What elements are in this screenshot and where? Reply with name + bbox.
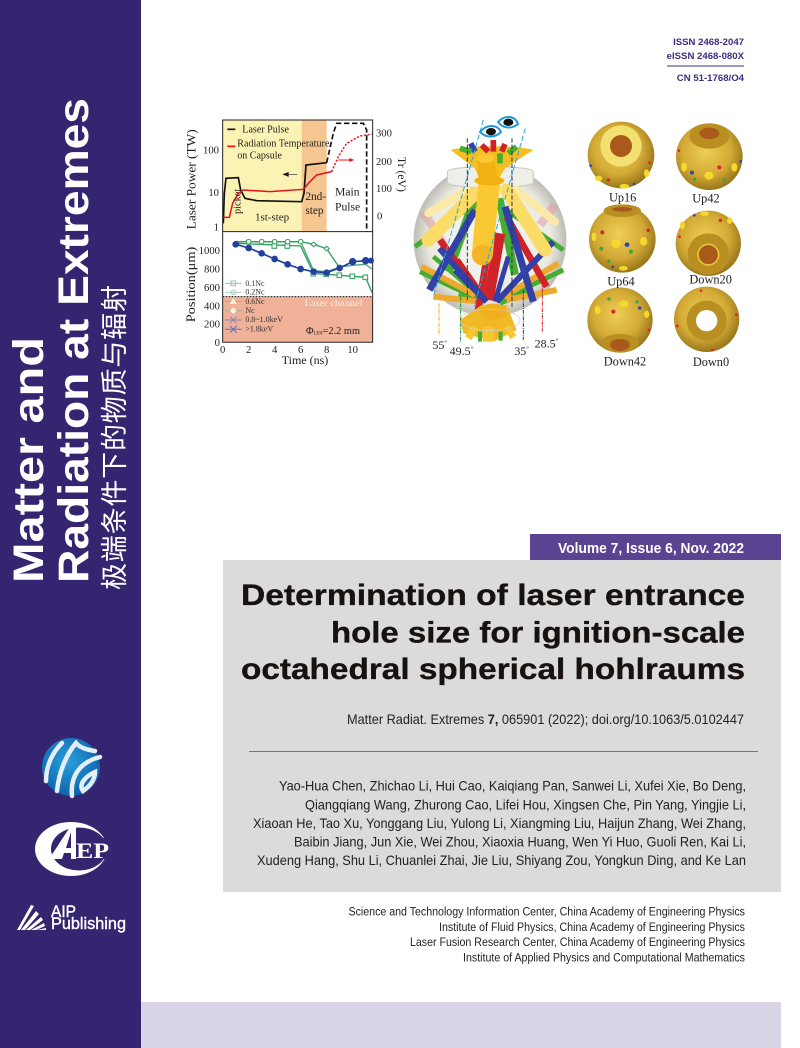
top chart labels xyxy=(185,124,408,233)
lower chart text: 200 xyxy=(204,320,220,331)
ISSN block xyxy=(667,37,745,84)
central top rod xyxy=(477,158,498,178)
hohlraum 3D illustration xyxy=(414,117,566,358)
angle labels: ° xyxy=(471,345,474,352)
capsule labels: Up64 xyxy=(607,274,635,288)
ISSN block: eISSN 2468-080X xyxy=(667,51,745,62)
capsule Up64 xyxy=(589,204,656,273)
top chart labels: Tr (eV) xyxy=(395,157,408,192)
icon: eyes xyxy=(480,117,518,136)
bottom band xyxy=(141,1002,781,1048)
top chart labels: on Capsule xyxy=(237,151,283,162)
article title: octahedral spherical hohlraums xyxy=(241,653,745,686)
lower chart text: 1000 xyxy=(199,246,220,257)
arrows xyxy=(283,172,297,176)
affiliations: Institute of Fluid Physics, China Academy of Engineering Physics xyxy=(439,920,745,934)
rods: red xyxy=(440,217,547,315)
laser pulse line xyxy=(223,163,327,223)
legend: 0.1Nc xyxy=(245,279,265,288)
lower chart text: Time (ns) xyxy=(282,353,328,367)
bottom cap with rods xyxy=(460,304,520,342)
lower chart text: =2.2 mm xyxy=(323,326,360,337)
legend: 0.2Nc xyxy=(245,287,265,296)
authors: Xudeng Hang, Shu Li, Chuanlei Zhai, Jie Liu, Shiyang Zou, Yongkun Ding, and Ke Lan xyxy=(257,853,746,868)
top chart labels: 300 xyxy=(376,128,392,139)
top chart labels: Laser Pulse xyxy=(242,124,290,135)
top chart labels: step xyxy=(305,205,324,217)
background pale rods xyxy=(423,205,555,247)
glass sphere xyxy=(414,164,566,316)
lower chart text: 800 xyxy=(204,265,220,276)
panel: orange second step xyxy=(302,120,327,232)
chart: laser pulse and position xyxy=(184,120,408,367)
top chart labels: 200 xyxy=(376,157,392,168)
channel boundary xyxy=(223,295,373,298)
dashed sight lines xyxy=(433,120,542,343)
lower chart text: 6 xyxy=(298,345,304,356)
affiliations: Science and Technology Information Center, China Academy of Engineering Physics xyxy=(348,905,745,919)
top chart labels: Radiation Temperature xyxy=(237,139,330,150)
top chart labels: picket xyxy=(233,189,244,214)
capsule Up42 xyxy=(676,123,743,190)
capsule Down0 xyxy=(674,287,739,352)
top funnel xyxy=(451,146,533,180)
grey title panel xyxy=(223,560,781,892)
capsule labels xyxy=(604,190,732,369)
lower chart text: 10 xyxy=(347,345,358,356)
rods: large yellow xyxy=(428,190,555,250)
gold capsule models xyxy=(587,122,743,369)
lower chart text: 0 xyxy=(220,345,225,356)
volume banner xyxy=(530,534,781,560)
angle labels: 49.5 xyxy=(450,344,471,358)
lower chart text: 0 xyxy=(215,338,220,349)
angle labels: ° xyxy=(526,345,529,352)
volume banner: Volume 7, Issue 6, Nov. 2022 xyxy=(558,540,744,557)
radiation temperature line xyxy=(223,172,332,217)
lower chart text: 4 xyxy=(272,345,278,356)
panel: yellow picket and first step xyxy=(223,120,302,232)
capsule labels: Down20 xyxy=(689,273,732,287)
left spine xyxy=(0,0,141,1048)
capsule Up16 xyxy=(588,122,654,189)
lower chart text: Φ xyxy=(306,326,314,337)
authors: Baibin Jiang, Jun Xie, Wei Zhou, Xiaoxia Huang, Wen Yi Huo, Guoli Ren, Kai Li, xyxy=(294,835,746,850)
panel: laser channel xyxy=(223,297,373,342)
capsule labels: Up16 xyxy=(609,190,636,204)
rods: orange xyxy=(422,263,558,302)
ISSN block: CN 51-1768/O4 xyxy=(677,73,745,84)
lower chart text: Laser channel xyxy=(305,299,363,309)
logo: CAEP xyxy=(35,822,109,876)
affiliations xyxy=(348,905,745,965)
lower chart text: 2 xyxy=(246,345,251,356)
glass neck xyxy=(447,167,533,188)
authors: Xiaoan He, Tao Xu, Yonggang Liu, Yulong Li, Xiangming Liu, Haijun Zhang, Wei Zhang, xyxy=(253,816,746,831)
top chart labels: Laser Power (TW) xyxy=(185,129,199,229)
angle labels: ° xyxy=(556,338,559,345)
affiliations: Institute of Applied Physics and Computational Mathematics xyxy=(463,951,745,965)
angle labels: 28.5 xyxy=(535,336,556,350)
legend: 0.8~1.0keV xyxy=(245,315,283,324)
capsule Down20 xyxy=(676,211,741,276)
top chart labels: 10 xyxy=(208,188,219,199)
top chart labels: 1st-step xyxy=(255,212,290,224)
citation: Matter Radiat. Extremes 7, 065901 (2022); doi.org/10.1063/5.0102447 xyxy=(347,712,744,727)
lower chart text: LEH xyxy=(314,331,323,336)
rods: blue xyxy=(429,207,553,302)
position series xyxy=(232,239,374,293)
article title xyxy=(241,579,745,686)
legend: >1.8keV xyxy=(245,324,273,333)
legend: Nc xyxy=(245,306,255,315)
top chart labels: 100 xyxy=(376,184,392,195)
angle labels: ° xyxy=(444,339,447,346)
legend: 0.6Nc xyxy=(245,297,265,306)
frames xyxy=(223,120,373,342)
top chart labels: Pulse xyxy=(335,200,360,213)
authors: Qiangqiang Wang, Zhurong Cao, Lifei Hou, Xingsen Che, Pin Yang, Yingjie Li, xyxy=(305,797,746,812)
top chart labels: 2nd- xyxy=(305,191,326,203)
rod: central yellow xyxy=(472,183,500,257)
affiliations: Laser Fusion Research Center, China Academy of Engineering Physics xyxy=(410,935,745,949)
logo: AIP Publishing: AIP xyxy=(51,902,76,921)
authors: Yao-Hua Chen, Zhichao Li, Hui Cao, Kaiqiang Pan, Sanwei Li, Xufei Xie, Bo Deng, xyxy=(279,778,746,794)
angle labels: 35 xyxy=(514,344,526,358)
article title: hole size for ignition-scale xyxy=(331,616,745,650)
logo: CAEP: EP xyxy=(76,838,109,863)
top chart labels: 0 xyxy=(377,212,382,223)
capsule Down42 xyxy=(587,287,653,353)
neck ring xyxy=(474,176,504,185)
journal title vertical: Matter and xyxy=(5,337,53,583)
journal title vertical xyxy=(5,98,98,583)
angle labels: 55 xyxy=(432,338,444,352)
lower chart text: 400 xyxy=(204,301,220,312)
lower chart text: 8 xyxy=(324,345,329,356)
logo: AIP Publishing xyxy=(17,902,126,933)
icon: AIP rays xyxy=(17,905,46,930)
top chart labels: Main xyxy=(335,185,360,198)
capsule labels: Down0 xyxy=(693,355,729,369)
lower chart text: 600 xyxy=(204,283,220,294)
top chart labels: 1 xyxy=(214,222,219,233)
capsule labels: Up42 xyxy=(692,191,720,205)
authors xyxy=(253,778,746,868)
logo: globe xyxy=(42,738,100,796)
top chart labels: 100 xyxy=(203,146,219,157)
legend xyxy=(225,279,283,333)
angle labels xyxy=(432,336,559,358)
top rod tips xyxy=(460,140,517,163)
journal title vertical: Radiation at Extremes xyxy=(50,98,98,583)
rods: green xyxy=(415,198,563,303)
article title: Determination of laser entrance xyxy=(241,579,745,612)
lower chart text xyxy=(184,246,363,367)
capsule labels: Down42 xyxy=(604,354,646,368)
lower chart text: Position(μm) xyxy=(184,247,198,322)
logo: AIP Publishing: Publishing xyxy=(51,914,126,933)
ISSN block: ISSN 2468-2047 xyxy=(673,37,744,48)
journal title Chinese: 极端条件下的物质与辐射 xyxy=(100,285,130,590)
